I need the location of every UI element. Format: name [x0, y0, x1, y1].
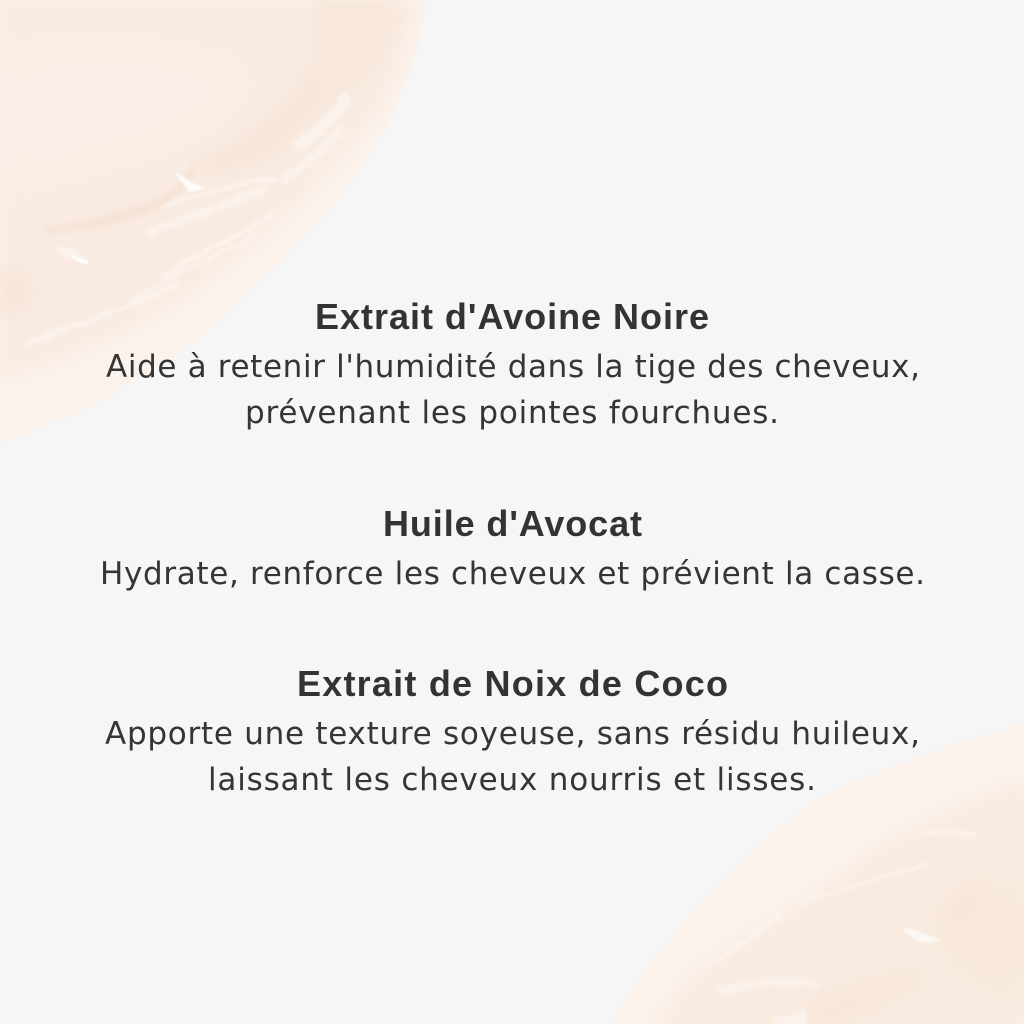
heading: Extrait d'Avoine Noire: Extrait d'Avoine Noire [315, 296, 709, 337]
text: coconut extract benefit line 1: Apporte une texture soyeuse, sans résidu huileux, [105, 716, 920, 752]
foam highlights: top left [25, 100, 345, 345]
cream swatch: top left [0, 0, 426, 444]
foam highlights: bottom right [710, 832, 975, 990]
text: avocado oil benefit: Hydrate, renforce les cheveux et prévient la casse. [100, 556, 925, 592]
text: coconut extract benefit line 2: laissant les cheveux nourris et lisses. [208, 762, 816, 798]
heading: Extrait de Noix de Coco: Extrait de Noix de Coco [297, 663, 728, 704]
text: oat extract benefit line 2: prévenant les pointes fourchues. [245, 395, 779, 431]
text: oat extract benefit line 1: Aide à retenir l'humidité dans la tige des cheveux, [106, 349, 920, 385]
heading: Huile d'Avocat: Huile d'Avocat [383, 503, 642, 544]
cream swatch: bottom right [612, 723, 1024, 1024]
